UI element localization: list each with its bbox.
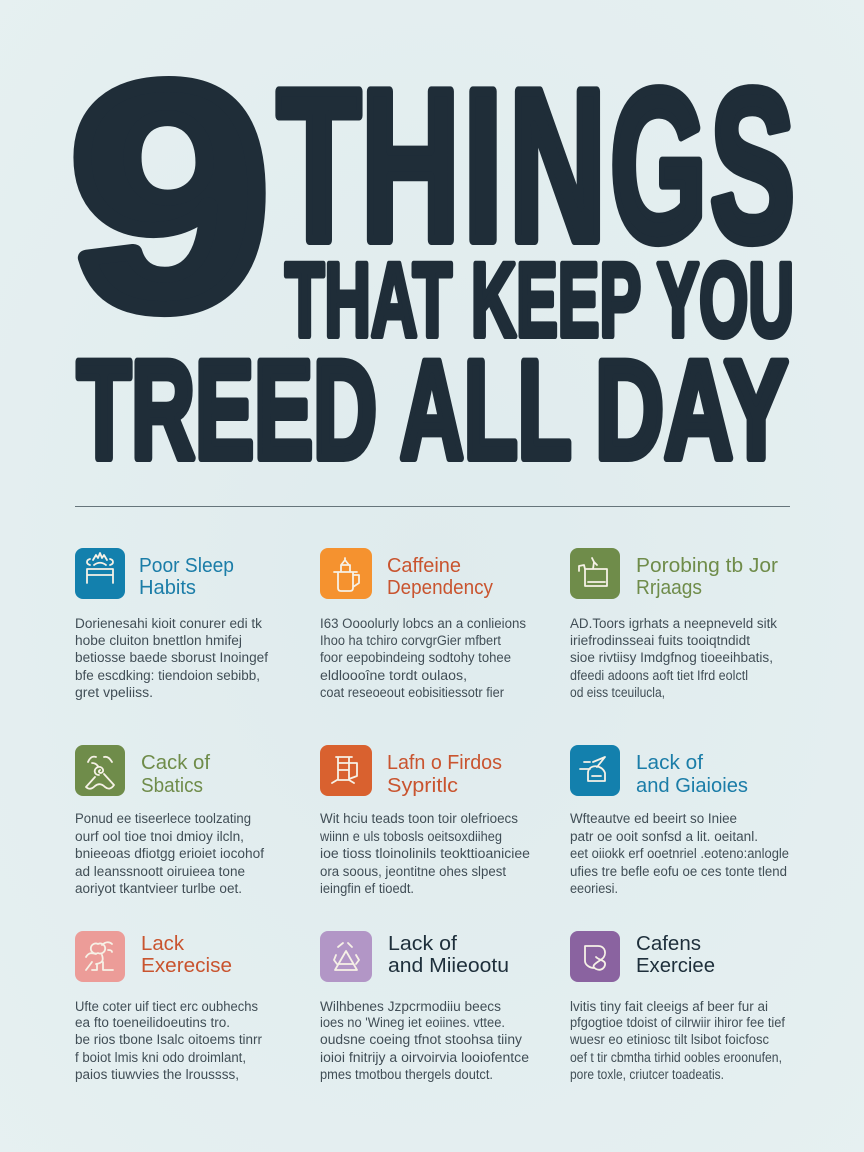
icon: bed — [75, 548, 125, 599]
heading: Habits — [139, 577, 196, 599]
body text: pfgogtioe tdoist of cilrwiir ihiror fee tief — [570, 1015, 785, 1030]
body text: AD.Toors igrhats a neepneveld sitk — [570, 616, 777, 631]
panel: porobing tb jor rrjaags — [570, 548, 778, 700]
heading: Lack of — [388, 933, 457, 955]
icon: dome with check — [570, 745, 620, 796]
heading: and Giaioies — [636, 775, 748, 797]
title line: THAT KEEP YOU: KEEP — [471, 242, 640, 359]
body text: pore toxle, criutcer toadeatis. — [570, 1067, 724, 1082]
body text: coat reseoeout eobisitiessotr fier — [320, 685, 504, 700]
title — [70, 19, 795, 488]
heading: Lack — [141, 933, 185, 955]
body text: eldloooîne tordt oulaos, — [320, 668, 467, 683]
body text: lvitis tiny fait cleeigs af beer fur ai — [570, 999, 768, 1014]
body text: wiinn e uls tobosls oeitsoxdiiheg — [319, 829, 502, 844]
body text: gret vpeliiss. — [75, 685, 153, 700]
heading: Lafn o Firdos — [387, 752, 502, 774]
body text: ora soous, jeontitne ohes slpest — [320, 864, 506, 879]
body text: iriefrodinsseai fuits tooiqtndidt — [570, 633, 750, 648]
body text: od eiss tceuilucla, — [570, 685, 665, 700]
icon: box — [570, 548, 620, 599]
panel: cafens exerciee — [569, 931, 785, 1082]
title line: THINGS: I — [463, 44, 503, 286]
body text: paios tiuwvies the lroussss, — [75, 1067, 239, 1082]
body text: eet oiiokk erf ooetnriel .eoteno:anlogle — [570, 846, 789, 861]
body text: ioe tioss tloinolinils teokttioaniciee — [320, 846, 530, 861]
body text: eeoriesi. — [570, 881, 618, 896]
panel: caffeine dependency — [320, 548, 526, 700]
heading: Poor Sleep — [139, 555, 234, 577]
heading: Lack of — [636, 752, 703, 774]
body text: bnieeoas dfiotgg erioiet iocohof — [75, 846, 264, 861]
heading: and Miieootu — [388, 955, 509, 977]
body text: ea fto toeneilidoeutins tro. — [75, 1015, 230, 1030]
body text: Ufte coter uif tiect erc oubhechs — [75, 999, 258, 1014]
title line: TREED ALL DAY: TREED — [77, 331, 377, 488]
icon: swirl figure — [75, 745, 125, 796]
body text: ioes no 'Wineg iet eoiines. vttee. — [320, 1015, 505, 1030]
title line: THINGS: N — [509, 44, 606, 286]
body text: pmes tmotbou thergels doutct. — [320, 1067, 493, 1082]
body text: bfe escdking: tiendoion sebibb, — [75, 668, 260, 683]
panel: cack of sbatics — [75, 745, 264, 896]
body text: oudsne coeing tfnot stoohsa tiiny — [320, 1032, 522, 1047]
panel: lack of and miieootu — [320, 931, 529, 1082]
body text: oef t tir cbmtha tirhid oobles eroonufen, — [570, 1050, 782, 1065]
body text: ad leanssnoott oiruieea tone — [75, 864, 245, 879]
body text: Dorienesahi kioit conurer edi tk — [75, 616, 262, 631]
body text: ieingfin ef tioedt. — [320, 881, 414, 896]
body text: I63 Oooolurly lobcs an a conlieions — [320, 616, 526, 631]
title line: TREED ALL DAY: ALL — [400, 331, 570, 488]
panel: lafn o firdos sypritlc — [319, 745, 530, 896]
icon: triangle figure — [320, 931, 372, 982]
icon: cup — [320, 548, 372, 599]
icon: exercise figure — [75, 931, 125, 982]
body text: betiosse baede sborust Inoingef — [75, 650, 268, 665]
body text: f boiot lmis kni odo droimlant, — [75, 1050, 246, 1065]
body text: hobe cluiton bnettlon hmifej — [75, 633, 242, 648]
heading: Sypritlc — [387, 775, 458, 797]
body text: ufies tre befle eofu oe ces tonte tlend — [570, 864, 787, 879]
heading: Exerecise — [141, 955, 232, 977]
body text: Wfteautve ed beeirt so Iniee — [570, 811, 737, 826]
heading: Rrjaags — [636, 577, 702, 599]
body text: foor eepobindeing sodtohy tohee — [320, 650, 511, 665]
panel: poor sleep habits — [75, 548, 268, 700]
body text: Wit hciu teads toon toir olefrioecs — [320, 811, 518, 826]
title line: THAT KEEP YOU: THAT — [285, 242, 452, 359]
title line: THINGS: S — [710, 44, 795, 286]
heading: Porobing tb Jor — [636, 555, 778, 577]
body text: Ponud ee tiseerlece toolzating — [75, 811, 251, 826]
body text: be rios tbone Isalc oitoems tinrr — [75, 1032, 262, 1047]
title line: THINGS: G — [610, 44, 707, 286]
body text: Ihoo ha tchiro corvgrGier mfbert — [320, 633, 501, 648]
heading: Dependency — [387, 577, 493, 599]
panel: lack of and giaioies — [570, 745, 789, 896]
body text: Wilhbenes Jzpcrmodiiu beecs — [320, 999, 501, 1014]
body text: sioe rivtiisy Imdgfnog tioeeihbatis, — [570, 650, 773, 665]
body text: dfeedi adoons aoft tiet Ifrd eolctl — [570, 668, 748, 683]
heading: Cack of — [141, 752, 210, 774]
heading: Cafens — [636, 933, 701, 955]
panel: lack exerecise — [75, 931, 262, 1082]
heading: Exerciee — [636, 955, 715, 977]
icon: trolley mug — [320, 745, 372, 796]
body text: ioioi fnitrijy a oirvoirvia looiofentce — [320, 1050, 529, 1065]
body text: patr oe ooit sonfsd a lit. oeitanl. — [570, 829, 758, 844]
title numeral 9: 9 — [70, 19, 270, 374]
heading: Sbatics — [141, 775, 203, 797]
body text: aoriyot tkantvieer turlbe oet. — [75, 881, 242, 896]
body text: wuesr eo etiniosc tilt lsibot foicfosc — [569, 1032, 769, 1047]
title line: THINGS: TH — [277, 44, 460, 286]
heading: Caffeine — [387, 555, 461, 577]
icon: knot — [570, 931, 620, 982]
body text: ourf ool tioe tnoi dmioy ilcln, — [75, 829, 244, 844]
